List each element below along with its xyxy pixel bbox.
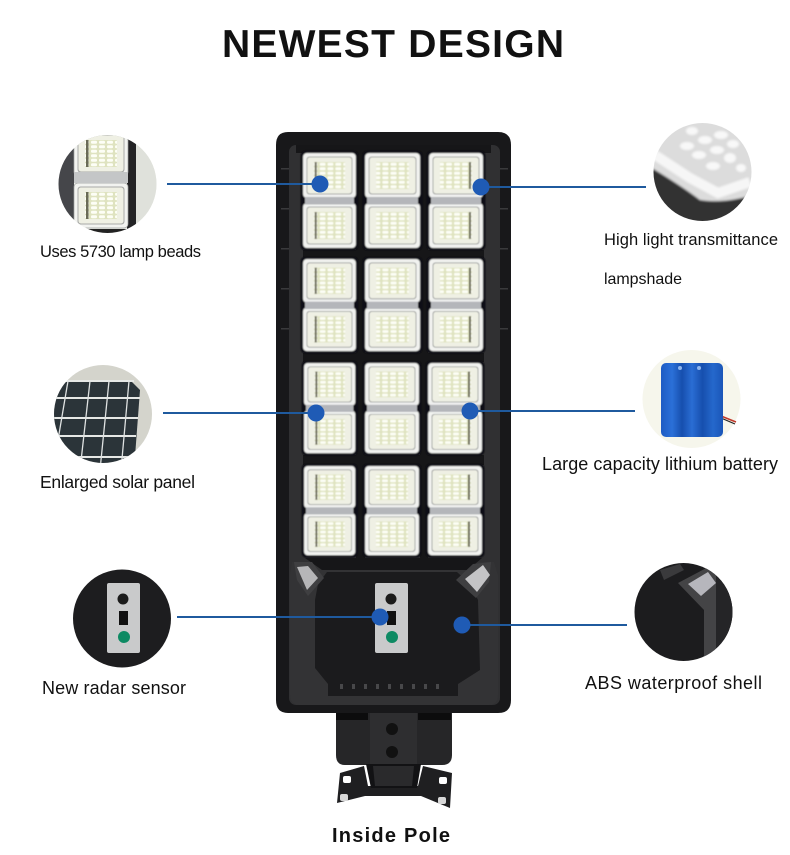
label: ABS waterproof shell: [585, 673, 762, 693]
dot: [372, 608, 388, 626]
lamp body shell: [276, 132, 511, 713]
callout: solar panel: [40, 364, 324, 492]
icon: solar panel close-up: [53, 364, 153, 470]
label: New radar sensor: [42, 678, 186, 698]
dot: [454, 616, 470, 634]
dot: [312, 176, 328, 192]
icon: lamp beads close-up: [58, 131, 158, 235]
title: NEWEST DESIGN: [222, 23, 564, 66]
connector line: [462, 624, 627, 626]
connector line: [163, 412, 316, 414]
callout: lamp beads: [40, 131, 328, 261]
connector line: [481, 186, 646, 188]
icon: battery: [642, 350, 740, 448]
inner panel: [289, 145, 500, 705]
label: Uses 5730 lamp beads: [40, 243, 201, 261]
vents: [340, 684, 439, 689]
solar street lamp product photo: [276, 132, 511, 808]
label: Large capacity lithium battery: [542, 454, 778, 474]
label: Enlarged solar panel: [40, 472, 195, 492]
side ribs: [281, 168, 508, 330]
dot: [472, 178, 490, 196]
dark channels between module columns: [296, 145, 491, 565]
dot: [462, 402, 478, 420]
LED modules: [301, 150, 486, 558]
lower housing: [290, 558, 498, 705]
mounting bracket: [336, 700, 452, 808]
callout: lampshade: [472, 120, 778, 288]
connector line: [470, 410, 635, 412]
sensor plate: [375, 583, 408, 653]
label: High light transmittance: [604, 231, 778, 249]
dot: [308, 404, 324, 422]
connector line: [167, 183, 320, 185]
icon: radar sensor close-up: [73, 570, 171, 668]
callout: radar sensor: [42, 570, 388, 698]
label line two: lampshade: [604, 271, 682, 288]
connector line: [177, 616, 380, 618]
callout: ABS shell: [454, 562, 762, 693]
callout: lithium battery: [462, 350, 778, 474]
icon: lampshade close-up: [654, 123, 752, 221]
icon: shell close-up: [634, 562, 734, 662]
caption: inside pole: Inside Pole: [332, 825, 450, 847]
